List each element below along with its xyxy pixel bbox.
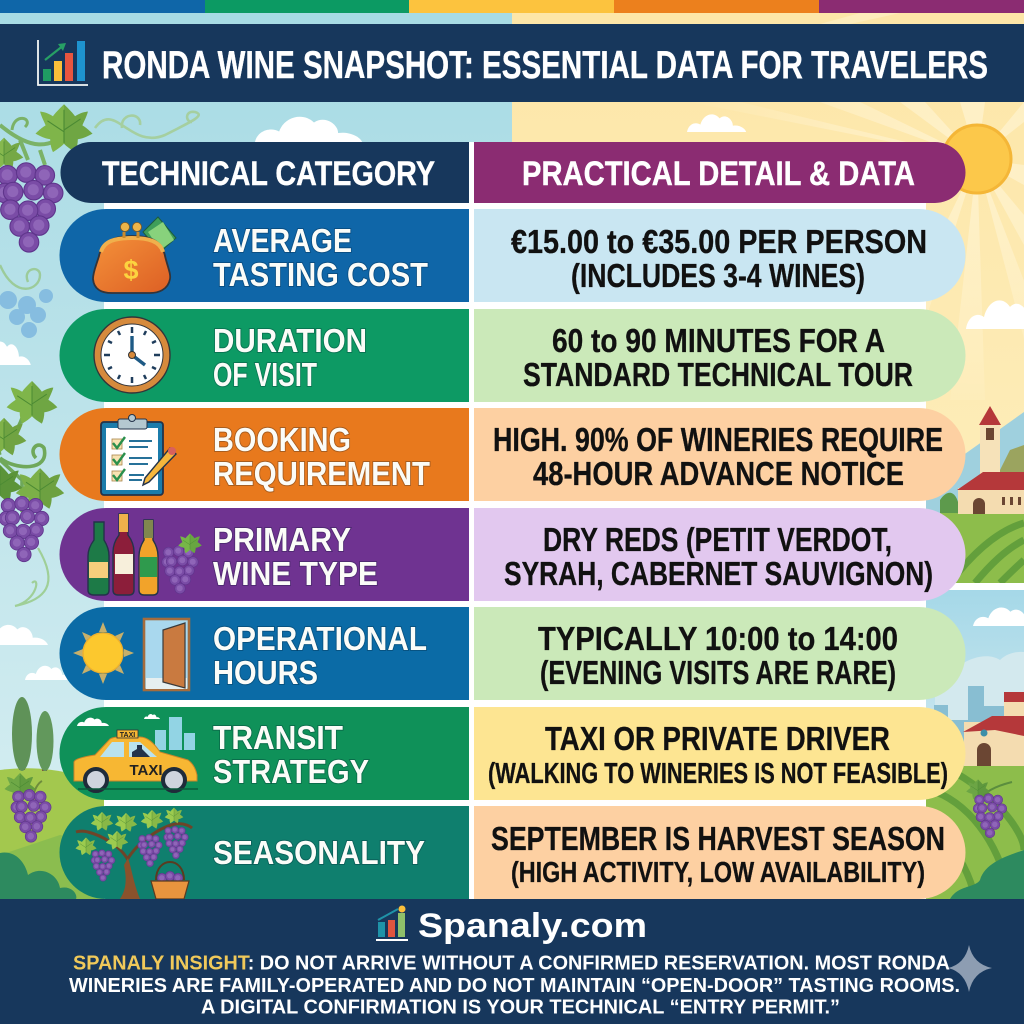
label: AVERAGE <box>213 222 352 259</box>
icon: vine tree and basket <box>75 808 192 899</box>
label: TASTING COST <box>213 256 428 293</box>
insight text: SPANALY INSIGHT: DO NOT ARRIVE WITHOUT A CONFIRMED RESERVATION. MOST RONDA <box>73 952 950 974</box>
icon: clock <box>94 317 170 393</box>
label <box>213 719 369 790</box>
value: hours: (EVENING VISITS ARE RARE) <box>540 654 896 691</box>
label: STRATEGY <box>213 753 369 790</box>
label <box>213 421 430 492</box>
value: tasting cost: (INCLUDES 3-4 WINES) <box>571 257 865 294</box>
value: tasting cost <box>474 209 966 302</box>
icon: purse <box>93 217 176 293</box>
row: booking requirement <box>60 408 469 501</box>
row: duration of visit <box>60 309 469 402</box>
footer <box>0 899 1024 1024</box>
table white backing <box>104 142 926 899</box>
label <box>213 620 427 691</box>
icon: sun and door <box>73 619 189 690</box>
insight text: A DIGITAL CONFIRMATION IS YOUR TECHNICAL “ENTRY PERMIT.” <box>201 996 840 1018</box>
value: duration: 60 to 90 MINUTES FOR A <box>552 322 885 359</box>
column header: practical detail <box>474 142 966 203</box>
row: primary wine type <box>60 508 469 601</box>
icon: sparkle <box>948 945 992 992</box>
label <box>213 222 428 293</box>
label: OPERATIONAL <box>213 620 427 657</box>
value: transit: TAXI OR PRIVATE DRIVER <box>545 720 890 757</box>
icon: taxi: TAXI <box>120 732 135 739</box>
scenery: lower left hill and trees <box>0 697 130 899</box>
top colour strip <box>0 0 1024 13</box>
value: hours <box>474 607 966 700</box>
value: duration: STANDARD TECHNICAL TOUR <box>523 356 913 393</box>
value: hours: TYPICALLY 10:00 to 14:00 <box>538 620 898 657</box>
icon: purse: $ <box>123 255 139 285</box>
insight text: WINERIES ARE FAMILY-OPERATED AND DO NOT MAINTAIN “OPEN-DOOR” TASTING ROOMS. <box>69 974 960 997</box>
icon: clipboard <box>101 414 176 495</box>
title bar <box>0 24 1024 102</box>
value: booking <box>474 408 966 501</box>
insight text <box>69 952 960 1018</box>
label <box>213 521 378 592</box>
row: operational hours <box>60 607 469 700</box>
label: HOURS <box>213 654 318 691</box>
label <box>213 322 367 393</box>
value: wine type <box>474 508 966 601</box>
scenery: clouds <box>0 114 1024 680</box>
label: BOOKING <box>213 421 351 458</box>
value: booking: 48-HOUR ADVANCE NOTICE <box>533 455 904 492</box>
row: average tasting cost <box>60 209 469 302</box>
scenery: farm village on lower right <box>900 590 1024 899</box>
label: TRANSIT <box>213 719 343 756</box>
icon: chart <box>38 40 88 85</box>
value: tasting cost: €15.00 to €35.00 PER PERSON <box>511 223 927 260</box>
icon: taxi: TAXI <box>129 762 163 779</box>
white band between right scenes <box>900 583 1024 590</box>
value: seasonality <box>474 806 966 899</box>
column header: practical detail: PRACTICAL DETAIL & DATA <box>522 155 915 193</box>
logo: Spanaly.com: Spanaly.com <box>418 907 647 945</box>
row: seasonality <box>60 806 469 899</box>
label: SEASONALITY <box>213 834 425 871</box>
label: WINE TYPE <box>213 555 378 592</box>
scenery: upper left vine and grapes <box>0 104 199 338</box>
scenery: church and vineyard on right <box>900 406 1024 583</box>
icon: wine bottles and grapes <box>88 514 202 595</box>
label: OF VISIT <box>213 356 317 393</box>
icon: taxi <box>74 714 198 791</box>
value: transit <box>474 707 966 800</box>
label: REQUIREMENT <box>213 455 430 492</box>
scenery: sun <box>943 125 1011 193</box>
row: transit strategy <box>60 707 469 800</box>
value: duration <box>474 309 966 402</box>
scenery: middle left vine and grapes <box>0 381 64 606</box>
column header: technical category <box>60 142 469 203</box>
column header: technical category: TECHNICAL CATEGORY <box>102 155 435 193</box>
label: DURATION <box>213 322 367 359</box>
label: PRIMARY <box>213 521 351 558</box>
value: seasonality: (HIGH ACTIVITY, LOW AVAILABILITY) <box>511 857 925 889</box>
value: wine type: DRY REDS (PETIT VERDOT, <box>543 521 892 558</box>
